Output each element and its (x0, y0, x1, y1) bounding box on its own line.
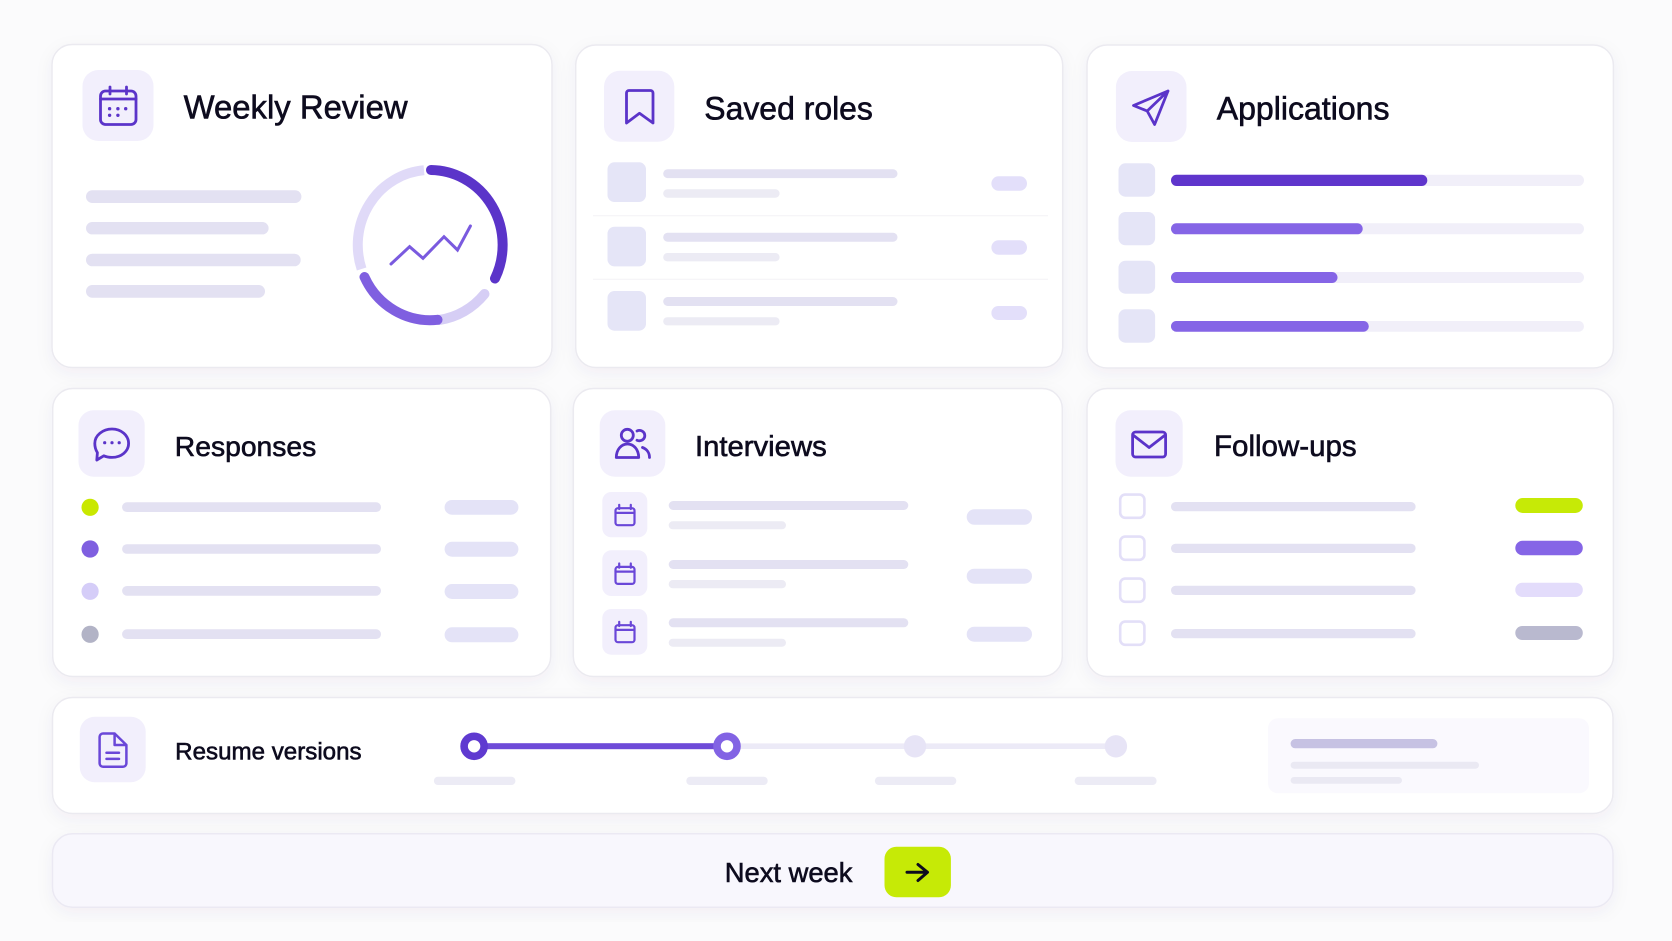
heading: Resume versions (175, 738, 362, 765)
heading: Responses (175, 431, 316, 462)
icon: bookmark (604, 71, 674, 142)
icon: chat bubble (78, 410, 145, 477)
card background (52, 44, 552, 368)
icon: small calendars (602, 492, 647, 655)
panel: Applications (1087, 45, 1613, 368)
heading: Next week (725, 857, 853, 888)
icon: document (80, 717, 146, 782)
status rows (82, 499, 518, 643)
card background (1087, 45, 1613, 368)
role rows (593, 162, 1048, 331)
icon: envelope (1116, 410, 1183, 477)
card background (53, 388, 551, 676)
text placeholder lines (86, 190, 301, 298)
panel: Interviews (573, 388, 1062, 676)
panel: Responses (53, 388, 551, 676)
panel: Saved roles (576, 45, 1063, 368)
progress rows (1118, 163, 1584, 343)
card background (52, 698, 1613, 814)
card background (1087, 388, 1613, 676)
button with arrow (884, 847, 951, 897)
heading: Applications (1217, 90, 1390, 126)
icon: paper plane (1116, 71, 1186, 142)
heading: Saved roles (704, 90, 873, 126)
summary panel (1268, 718, 1589, 793)
card background (576, 45, 1063, 368)
heading: Weekly Review (184, 88, 408, 126)
panel: Follow-ups (1087, 388, 1613, 676)
heading: Interviews (695, 431, 827, 463)
version timeline (434, 735, 1157, 785)
icon: people (600, 410, 665, 477)
icon: calendar (82, 70, 154, 141)
card background (573, 388, 1062, 676)
panel: Resume versions (52, 698, 1613, 814)
donut chart (358, 170, 503, 320)
heading: Follow-ups (1214, 430, 1357, 463)
trend line (391, 226, 470, 264)
interview rows (602, 492, 1032, 655)
panel: Next week (52, 834, 1613, 907)
panel: Weekly Review (52, 44, 552, 368)
card background (52, 834, 1613, 907)
checklist rows (1120, 495, 1583, 645)
